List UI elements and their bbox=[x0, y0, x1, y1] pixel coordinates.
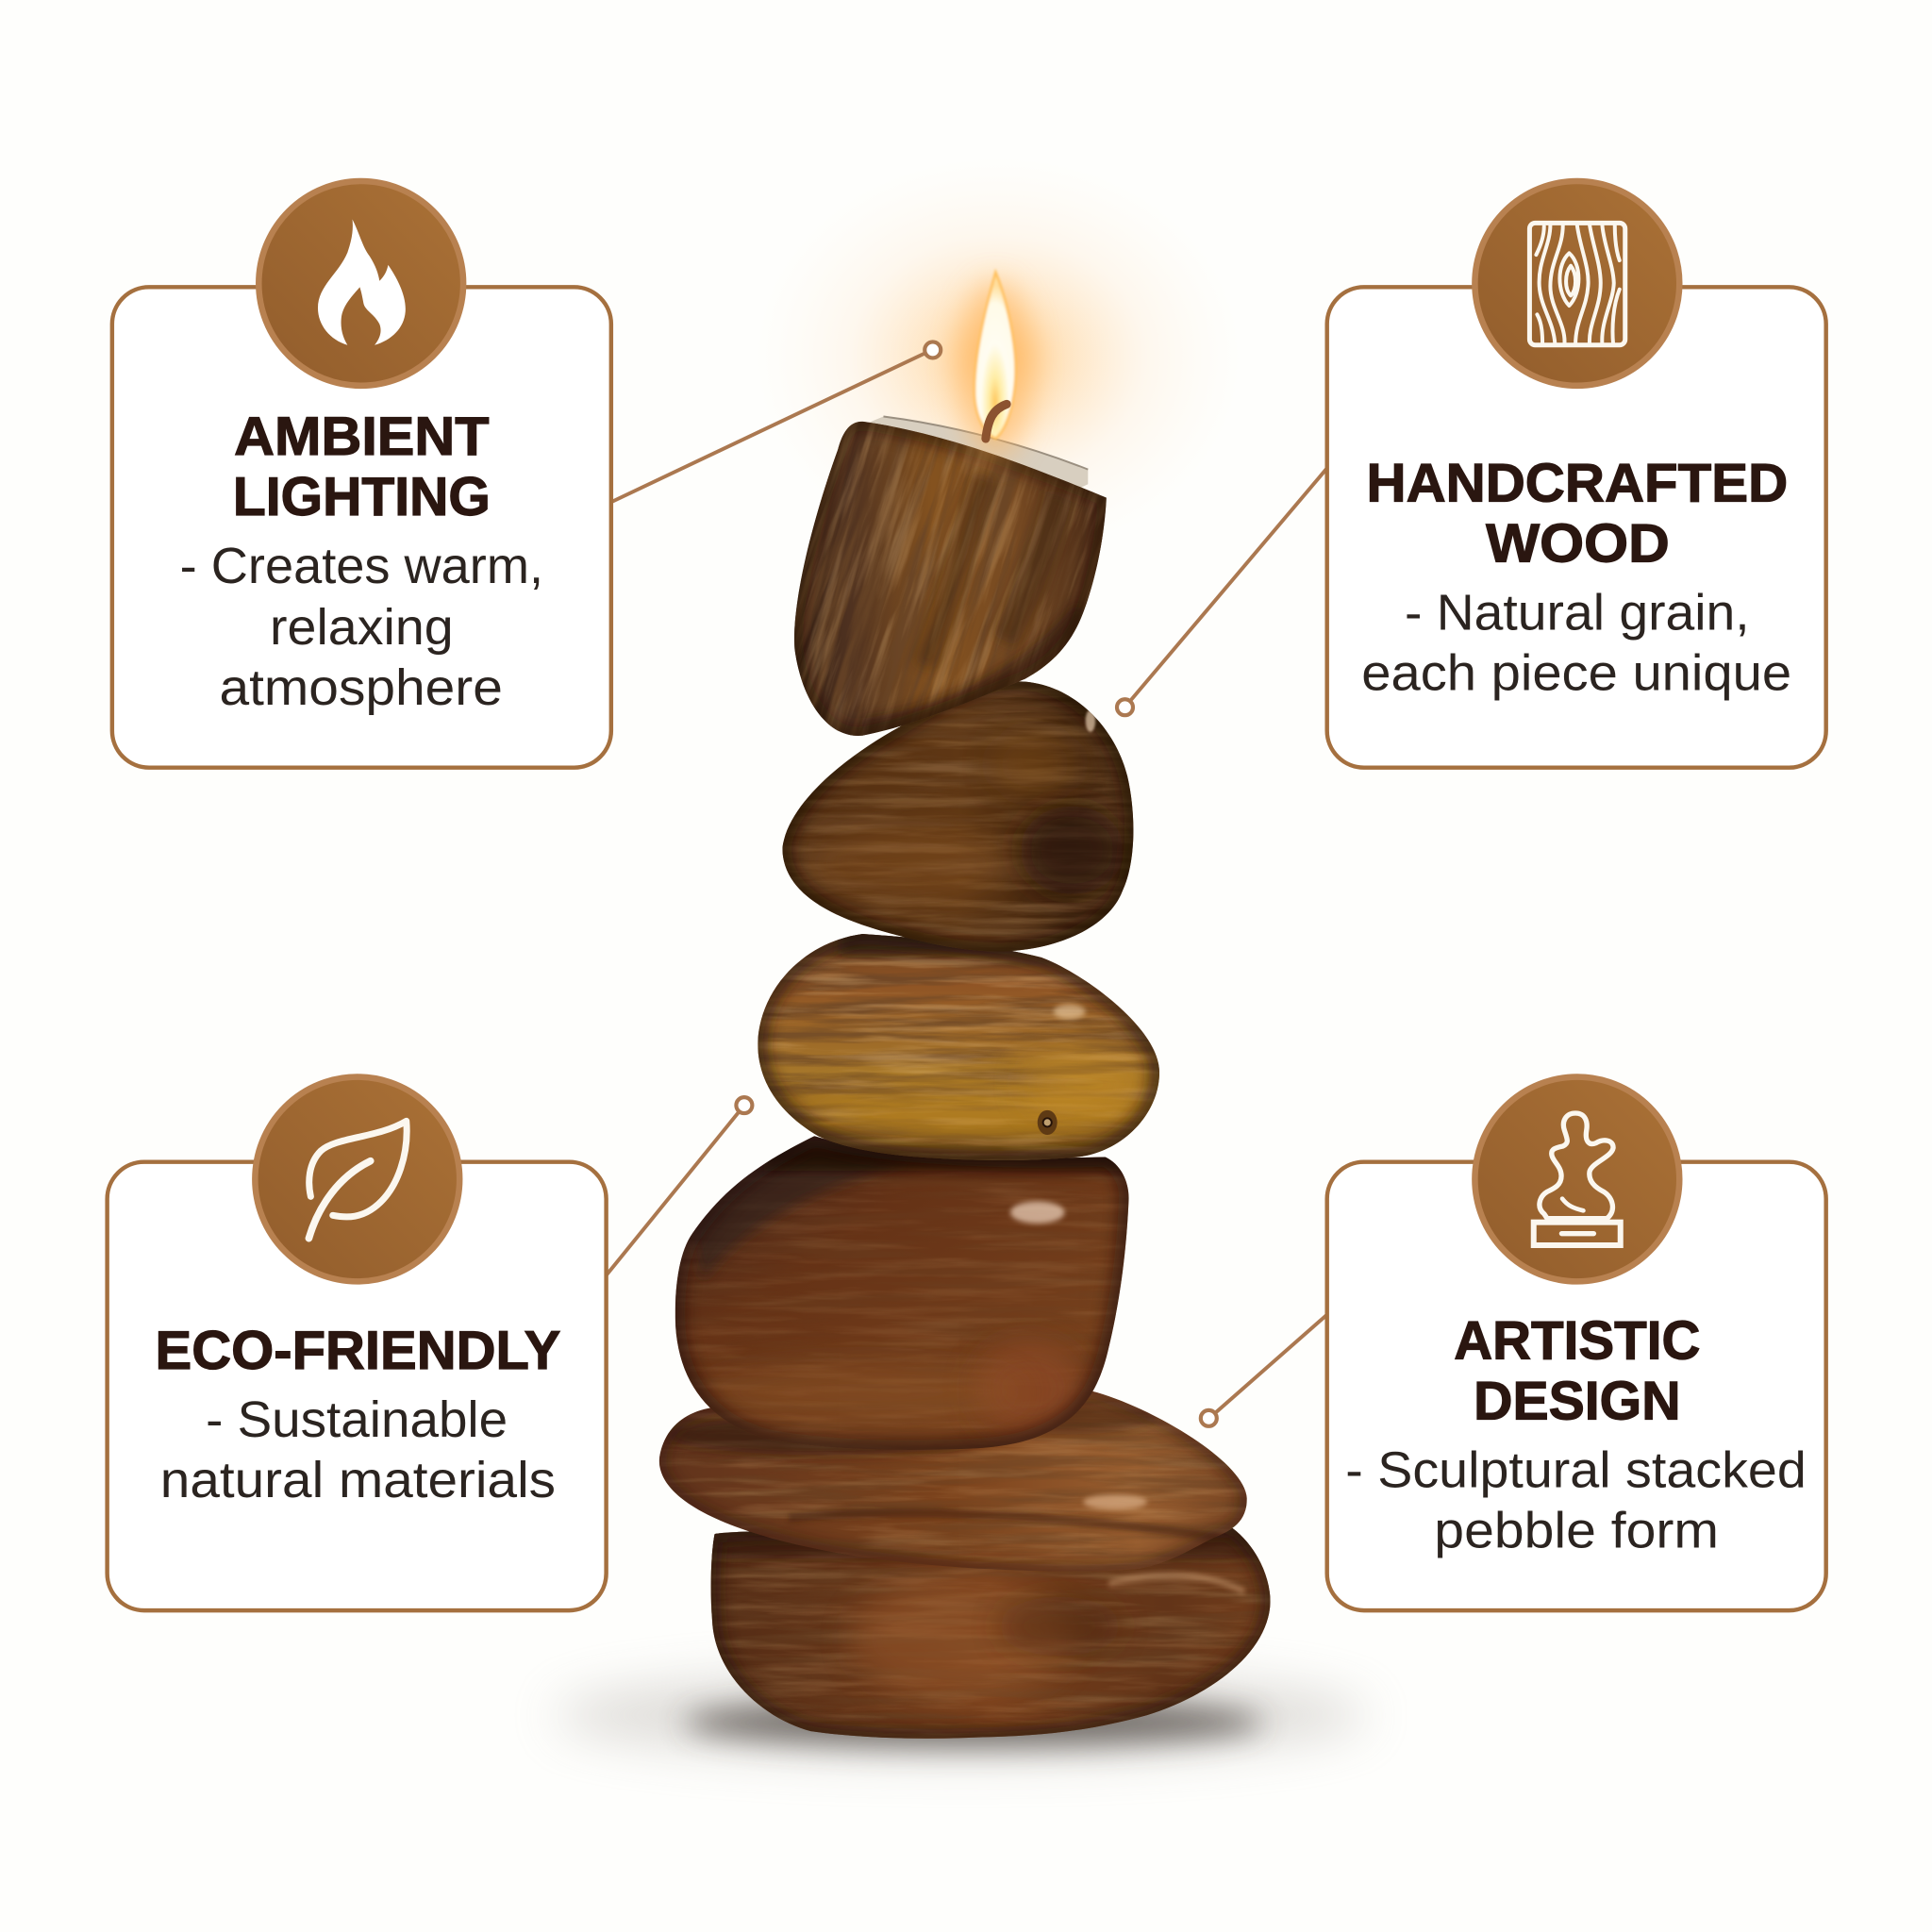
heading bbox=[233, 407, 491, 527]
heading: LIGHTING bbox=[233, 467, 491, 527]
icon: leaf bbox=[308, 1121, 407, 1239]
pebble 4: large stone bbox=[665, 1127, 1140, 1460]
panel: eco-friendly bbox=[108, 1077, 607, 1610]
tealight insert bbox=[862, 416, 1088, 492]
description: - Creates warm, bbox=[180, 539, 543, 594]
description: - Natural grain, bbox=[1405, 585, 1750, 641]
icon: wood grain bbox=[1529, 223, 1625, 345]
pebble 3: golden stone bbox=[752, 924, 1171, 1164]
panel: ambient lighting bbox=[112, 181, 611, 768]
description: natural materials bbox=[160, 1453, 556, 1508]
heading: ARTISTIC bbox=[1454, 1311, 1700, 1372]
heading bbox=[1366, 454, 1788, 575]
description: - Sculptural stacked bbox=[1345, 1442, 1807, 1498]
wood knot bbox=[1038, 1110, 1058, 1135]
candle holder: stacked wooden pebbles bbox=[650, 255, 1281, 1750]
flame glow bbox=[752, 154, 1244, 560]
leader line: ambient lighting bbox=[612, 341, 941, 502]
description bbox=[160, 1392, 556, 1508]
description: - Sustainable bbox=[206, 1392, 508, 1448]
ground shadow bbox=[555, 1674, 1368, 1757]
icon: flame bbox=[318, 219, 406, 345]
heading bbox=[1454, 1311, 1700, 1432]
description bbox=[180, 539, 543, 716]
pebble 6: base stone bbox=[711, 1528, 1271, 1739]
heading: AMBIENT bbox=[234, 407, 490, 467]
heading: ECO-FRIENDLY bbox=[156, 1321, 560, 1381]
pebble 2: dark stone bbox=[776, 672, 1140, 961]
panel: artistic design bbox=[1327, 1077, 1826, 1610]
pebble 1: candle cup bbox=[794, 421, 1107, 736]
icon: sculpture bbox=[1534, 1113, 1621, 1245]
pebble 5: flat stone bbox=[658, 1391, 1247, 1572]
heading: HANDCRAFTED bbox=[1366, 454, 1788, 514]
leader line: handcrafted wood bbox=[1117, 468, 1327, 715]
description bbox=[1345, 1442, 1807, 1558]
description: each piece unique bbox=[1361, 645, 1791, 701]
leader line: artistic design bbox=[1201, 1315, 1327, 1426]
candle flame and wick bbox=[958, 273, 1033, 458]
panel: handcrafted wood bbox=[1327, 181, 1826, 768]
description: relaxing bbox=[270, 600, 454, 656]
description: pebble form bbox=[1434, 1503, 1719, 1558]
heading: DESIGN bbox=[1474, 1372, 1681, 1432]
heading: WOOD bbox=[1486, 514, 1670, 575]
description: atmosphere bbox=[219, 660, 503, 716]
leader line: eco-friendly bbox=[607, 1097, 752, 1275]
description bbox=[1361, 585, 1791, 701]
